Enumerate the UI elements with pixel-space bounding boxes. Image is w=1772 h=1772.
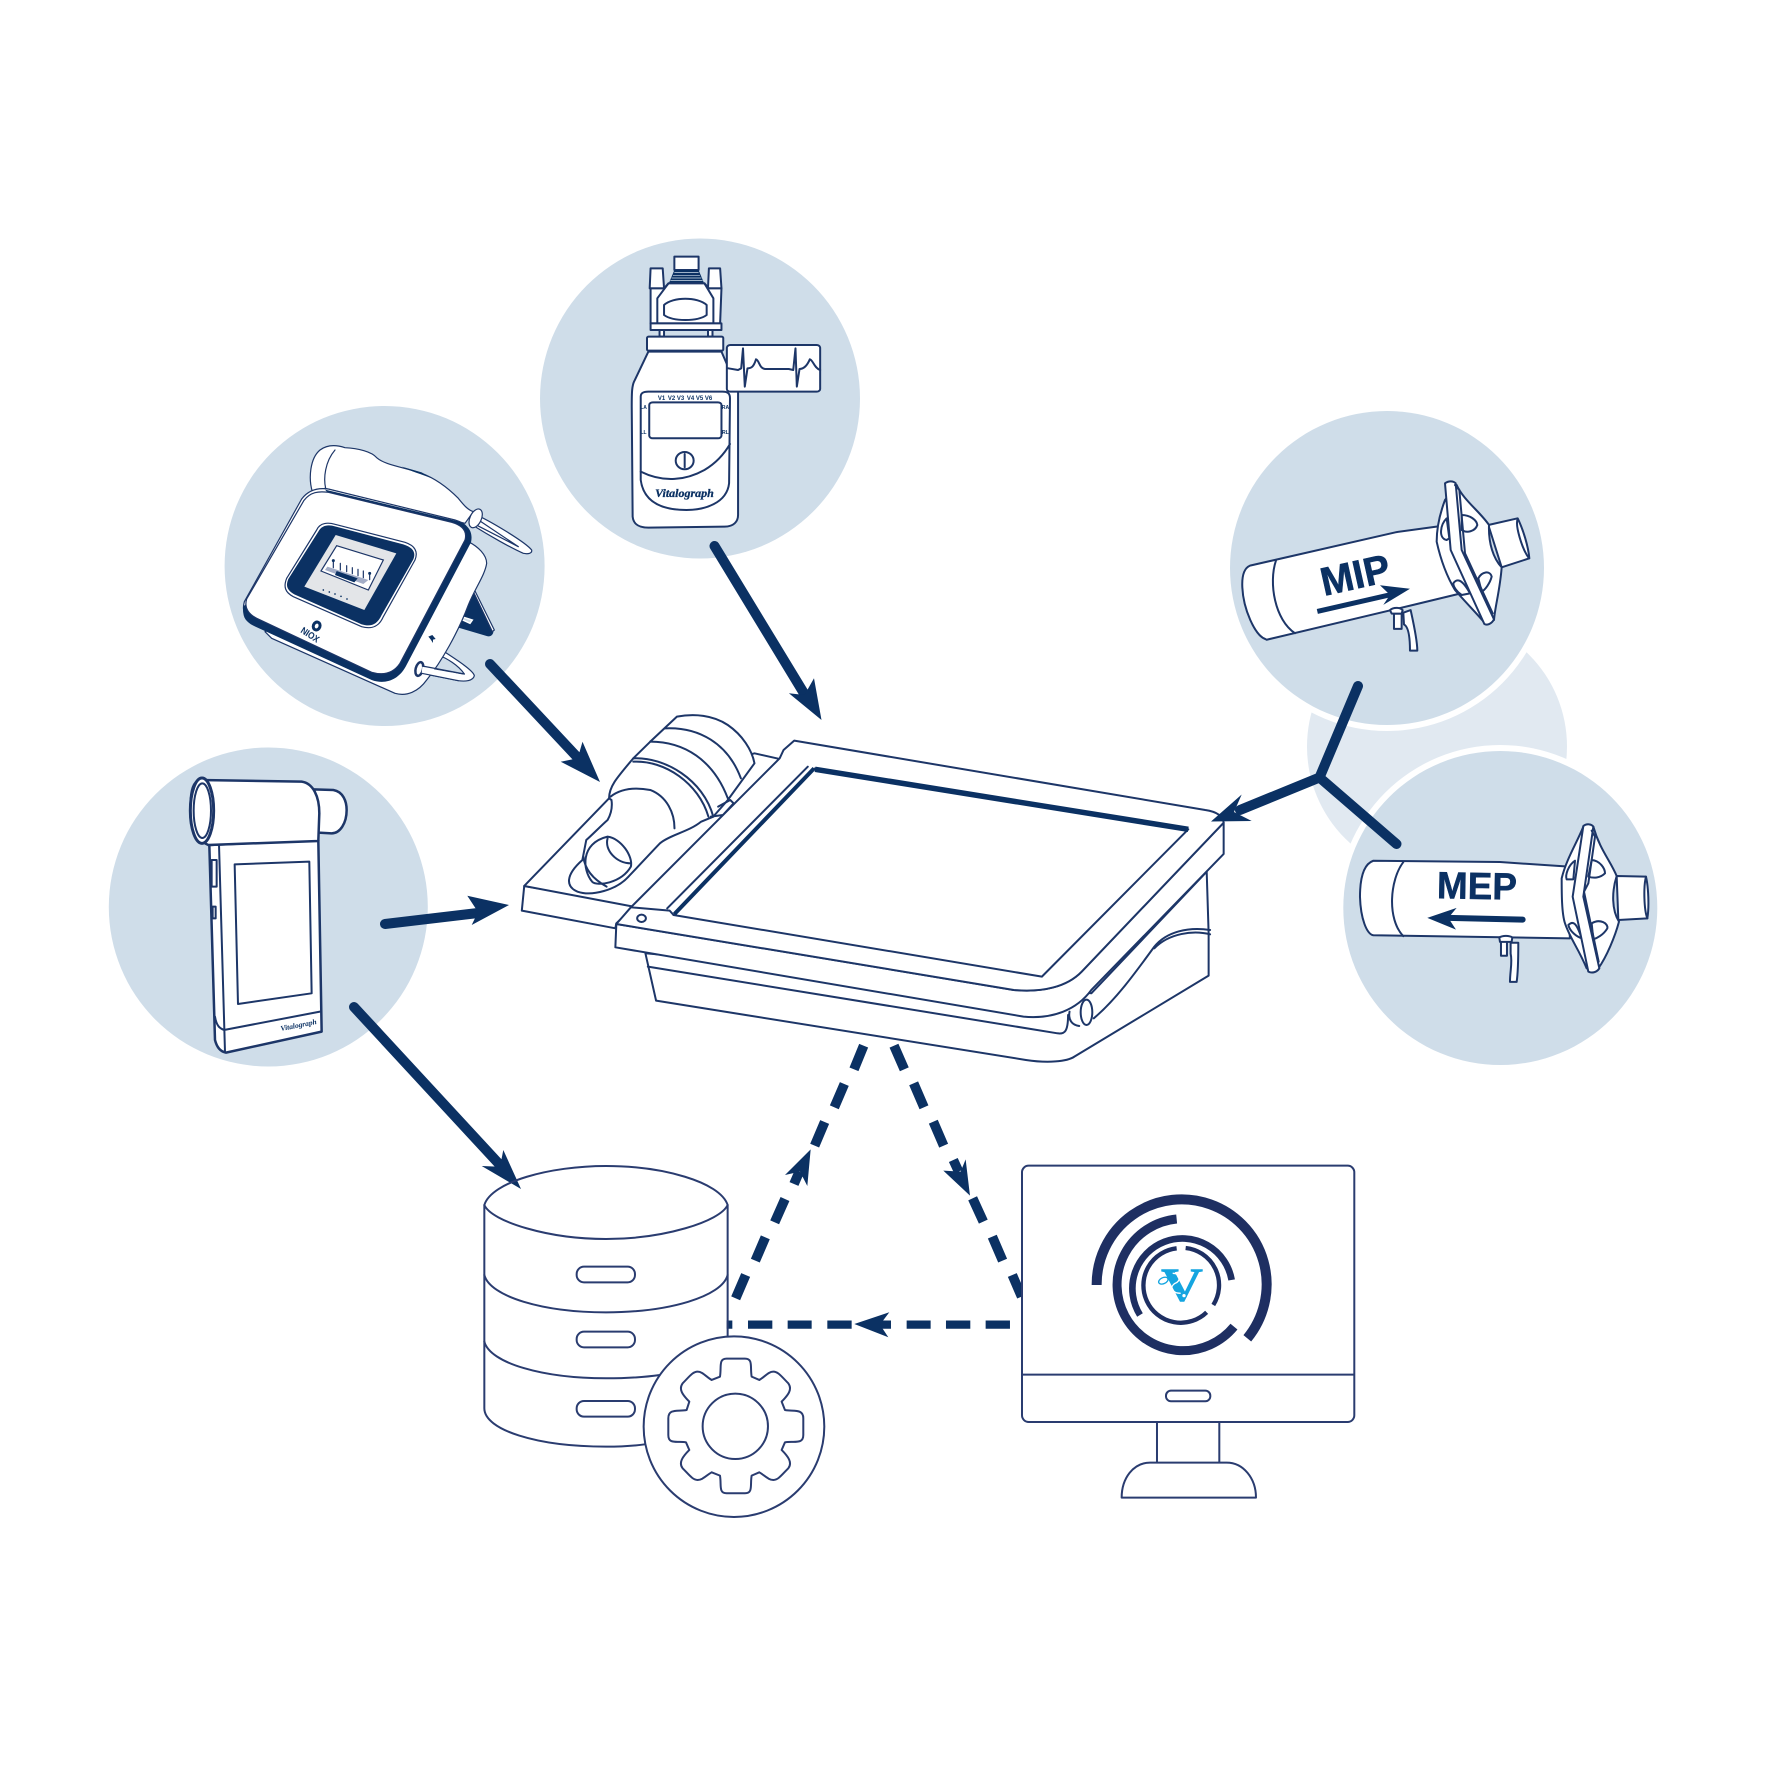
device frame and screen [615, 741, 1224, 1017]
database cylinder [484, 1166, 728, 1447]
dashed arrow: monitor to database [727, 1312, 1010, 1337]
ECG lead labels: LA [640, 405, 647, 411]
MIP label: MIP [1316, 547, 1394, 605]
background circles: inspiratory and expiratory overlap [1224, 405, 1663, 1071]
ECG lead labels: V3 [677, 396, 685, 402]
arrow: spirometer to database [354, 1007, 521, 1189]
dashed arrow: database to tablet [736, 1046, 864, 1298]
arrow: NIOX to tablet [490, 664, 600, 782]
panel: NIOX device circle [225, 406, 545, 726]
icon: database with gear [484, 1166, 824, 1517]
ECG lead labels: V6 [705, 396, 713, 402]
arrow: ECG device to tablet [714, 546, 822, 720]
NIOX brand text: NIOX [298, 625, 322, 646]
monitor outline [1022, 1166, 1354, 1498]
ECG device brand: Vitalograph [655, 486, 714, 500]
ECG lead labels: V4 [687, 396, 695, 402]
MEP label: MEP [1437, 865, 1517, 909]
device base [645, 872, 1210, 1062]
ECG lead labels: V2 [668, 396, 676, 402]
device mouthpiece handle [569, 715, 754, 893]
device tray [522, 753, 781, 928]
ECG lead labels: RL [722, 430, 729, 436]
main device: spirometry tablet [522, 715, 1224, 1062]
panel: handheld spirometer circle [109, 748, 428, 1066]
arrow: spirometer to tablet [385, 896, 509, 925]
ECG lead labels [640, 396, 729, 436]
panel: MIP mouthpiece [1242, 481, 1529, 651]
arrow: MIP and MEP to tablet [1211, 686, 1396, 844]
gear badge [644, 1336, 824, 1517]
spirometer brand: Vitalograph [280, 1017, 317, 1033]
ECG lead labels: LL [640, 430, 647, 436]
icon: monitor with software logo [1022, 1166, 1354, 1498]
panel: MEP mouthpiece [1360, 824, 1648, 982]
software logo rings [1097, 1199, 1267, 1351]
dashed arrow: tablet to monitor [894, 1046, 1022, 1297]
ECG lead labels: V1 [658, 396, 666, 402]
ECG lead labels: V5 [696, 396, 704, 402]
software logo monogram: V [1161, 1259, 1203, 1312]
panel: ECG device circle [540, 238, 860, 558]
ECG lead labels: RA [722, 405, 729, 411]
dashed data flows [727, 1046, 1022, 1337]
